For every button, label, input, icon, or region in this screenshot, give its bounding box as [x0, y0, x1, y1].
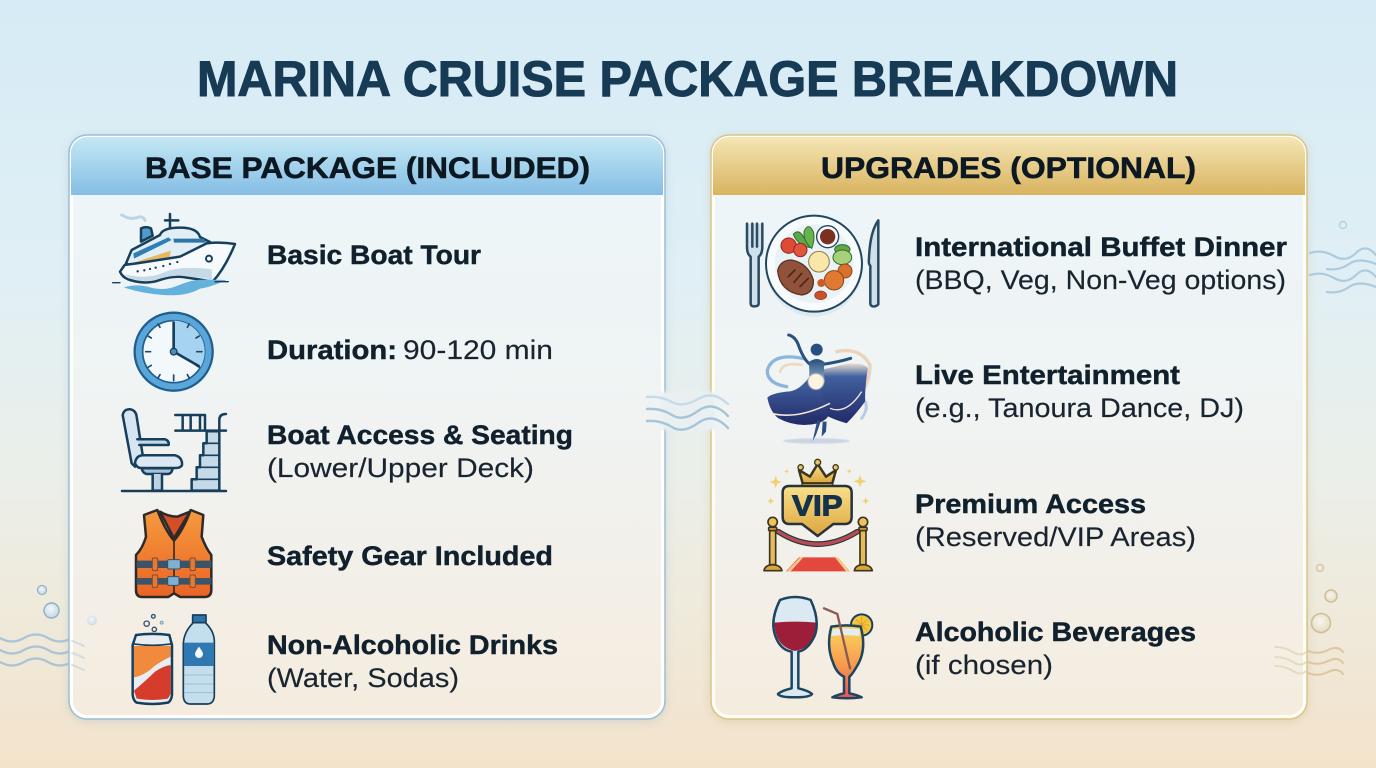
item: non-alcoholic drinks: (Water, Sodas) — [267, 663, 459, 693]
item: boat access and seating: Boat Access & Seating — [267, 420, 573, 450]
icon: soda can and water bottle — [133, 614, 214, 704]
decorative waves and bubble: upper right — [1310, 222, 1376, 292]
icon: cruise ship — [113, 214, 235, 295]
item: alcoholic beverages: Alcoholic Beverages — [915, 617, 1196, 647]
item: international buffet dinner — [915, 232, 1288, 295]
icon: seat and deck stairs — [122, 409, 226, 491]
item: international buffet dinner: International Buffet Dinner — [915, 232, 1288, 262]
item: live entertainment: Live Entertainment — [915, 360, 1180, 390]
icon: vip badge and rope: VIP — [792, 491, 843, 523]
item: alcoholic beverages — [915, 617, 1196, 680]
wave connector between panels — [647, 392, 728, 430]
item: boat access and seating: (Lower/Upper Deck) — [267, 453, 534, 483]
title: MARINA CRUISE PACKAGE BREAKDOWN — [197, 51, 1178, 107]
item: non-alcoholic drinks — [267, 630, 558, 693]
icon: tanoura dancer — [767, 335, 870, 444]
item: safety gear: Safety Gear Included — [267, 541, 553, 571]
item: boat access and seating — [267, 420, 573, 483]
icon: wine glass and cocktail — [773, 597, 872, 698]
panel header: base package — [71, 137, 663, 195]
icon: dinner plate with cutlery — [747, 216, 878, 317]
panel: upgrades — [711, 135, 1307, 721]
panel: base package — [69, 135, 665, 721]
item: live entertainment — [915, 360, 1244, 423]
item: duration — [267, 335, 553, 365]
faint overlaps on panels — [72, 616, 1306, 674]
icon: vip badge and rope — [764, 459, 872, 571]
decorative waves and bubbles: lower right — [1308, 564, 1343, 675]
icon: clock — [135, 313, 213, 391]
item: basic boat tour: Basic Boat Tour — [267, 240, 482, 270]
item: alcoholic beverages: (if chosen) — [915, 650, 1053, 680]
item: international buffet dinner: (BBQ, Veg, Non-Veg options) — [915, 265, 1286, 295]
icon: life vest — [136, 510, 211, 597]
panel header: base package: BASE PACKAGE (INCLUDED) — [145, 152, 590, 185]
item: premium access: Premium Access — [915, 489, 1146, 519]
decorative waves and bubbles: lower left — [0, 586, 72, 666]
item: premium access — [915, 489, 1196, 552]
panel header: upgrades: UPGRADES (OPTIONAL) — [821, 152, 1196, 185]
item: non-alcoholic drinks: Non-Alcoholic Drinks — [267, 630, 558, 660]
item: live entertainment: (e.g., Tanoura Dance, DJ) — [915, 393, 1244, 423]
panel header: upgrades — [713, 137, 1305, 195]
item: duration: 90-120 min — [403, 335, 553, 365]
item: duration: Duration: — [267, 335, 397, 365]
item: premium access: (Reserved/VIP Areas) — [915, 522, 1196, 552]
